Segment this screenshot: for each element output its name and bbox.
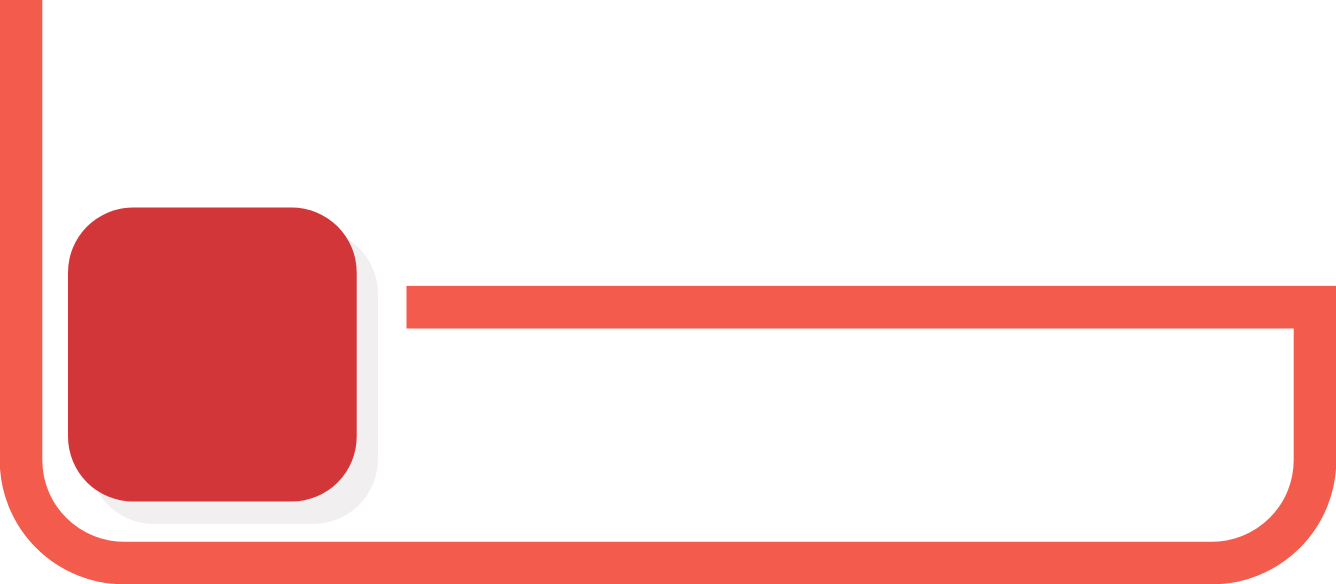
red rounded card bbox=[68, 208, 357, 502]
card shadow bbox=[89, 229, 378, 524]
